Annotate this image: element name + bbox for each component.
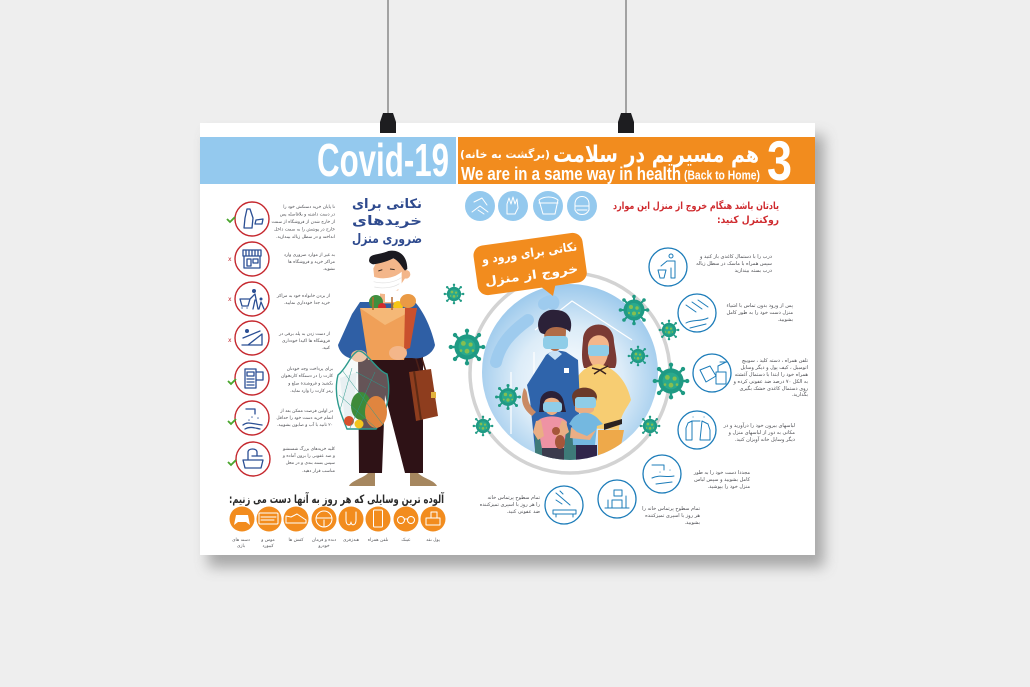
heading: shopping tips: خریدهای: [352, 214, 422, 229]
heading: shopping tips: [352, 197, 422, 247]
labels: دسته های: [232, 538, 250, 543]
labels: عینک: [401, 537, 411, 543]
step: disinfect items: روی دستمال کاغذی خشک بگیری: [740, 385, 809, 392]
step: clothes: دیگر وسایل خانه آویزان کنید.: [735, 436, 795, 443]
item: gloves: در دست داشته و بلافاصله پس: [280, 212, 335, 218]
step: disinfect bed: [480, 486, 583, 524]
poster sheet: [200, 123, 815, 555]
hanging strings: [388, 0, 626, 116]
reminder text: یادتان باشد هنگام خروج از منزل این موارد: [613, 199, 779, 212]
icon: wash: [465, 191, 495, 221]
step: trash: [649, 248, 772, 286]
hands: [351, 346, 407, 362]
header: covid title: [200, 134, 456, 186]
header: orange banner: هم مسیریم در سلامت: [553, 142, 759, 168]
shoes: [349, 473, 437, 486]
reminder text: روکنترل کنید:: [717, 215, 779, 226]
item: hand wash: در اولین فرصت ممکن بعد از: [279, 408, 333, 414]
reminder text: [613, 199, 779, 226]
labels: خودرو: [317, 544, 330, 549]
header: orange banner: (برگشت به خانه): [460, 148, 550, 161]
step: disinfect items: بگذارید.: [792, 391, 808, 398]
step: surfaces: [598, 480, 701, 526]
blue disc: [482, 284, 658, 460]
labels: کفش ها: [289, 537, 304, 543]
item: sink: [228, 442, 336, 476]
step: wash hands: بشویید.: [777, 317, 793, 323]
labels: تلفن همراه: [368, 538, 389, 543]
step: wash hands: [678, 294, 794, 332]
step: disinfect bed: ضد عفونی کنید.: [507, 509, 540, 515]
viruses: [444, 284, 689, 436]
step: surfaces: هر روز با اسپری تمیزکننده: [645, 513, 700, 519]
step: disinfect bed: تمام سطوح پرتماس خانه: [487, 495, 541, 501]
torso and arms: [338, 302, 435, 359]
binder clips: [380, 113, 634, 133]
item: sink: مناسب قرار دهید.: [302, 469, 335, 474]
header: orange banner: We are in a same way in health: [461, 163, 681, 184]
labels: هندزفری: [343, 538, 360, 543]
labels: کیبورد: [262, 543, 274, 549]
groceries: [369, 294, 416, 311]
list: home entry steps: [480, 248, 809, 526]
step: wash hands: پس از ورود بدون تماس با اشیاء: [727, 303, 794, 309]
header: covid title: Covid-19: [317, 134, 449, 186]
step: surfaces: بشویید.: [684, 520, 700, 526]
disc highlights: [496, 320, 528, 362]
item: hand wash: ۲۰ ثانیه با آب و صابون بشویید.: [277, 422, 333, 428]
item: escalator: کنید.: [322, 345, 331, 351]
object: cash: [420, 506, 446, 532]
labels: دنده و فرمان: [312, 538, 336, 543]
item: card reader: رمز کارت را وارد نماید.: [290, 388, 333, 394]
poster shadow: [208, 135, 824, 567]
item: gloves: از خارج شدن از فروشگاه از سمت: [271, 219, 335, 225]
callout: entry and exit tips: [472, 232, 588, 296]
item: family at store: [228, 282, 330, 316]
object: phone: [366, 506, 390, 532]
step: wash again: کامل بشویید و سپس لباس: [694, 477, 751, 483]
item: gloves: خارج در پوشش را به سمت داخل: [274, 228, 335, 232]
item: card reader: کارت را در دستگاه کارتخوان: [281, 373, 334, 379]
object: keyboard: [256, 506, 282, 532]
object: steering wheel: [312, 506, 336, 532]
object: earphones: [338, 506, 364, 532]
list: shopping rules: [227, 202, 336, 476]
icon: mask: [567, 191, 597, 221]
step: clothes: [678, 411, 795, 449]
illustration: shopper: [336, 251, 438, 486]
item: family at store: x: [228, 296, 232, 303]
heading: contaminated objects: آلوده ترین وسایلی که هر روز به آنها دست می زنیم:: [229, 492, 445, 507]
head: [369, 251, 410, 303]
step: disinfect items: به الکل ۷۰ درصد ضد عفونی کرده و: [733, 379, 808, 385]
item: sink: کلیه خریدهای بزرگ شستشو: [282, 445, 336, 452]
item: gloves: [227, 202, 336, 240]
step: disinfect items: [693, 354, 809, 398]
top icons: protective gear: [465, 191, 597, 221]
trousers: [358, 352, 423, 473]
item: escalator: فروشگاه ها اکیدا خودداری: [282, 338, 330, 344]
net bag: [336, 351, 389, 429]
callout: entry and exit tips: خروج از منزل: [484, 262, 579, 290]
item: escalator: از دست زدن به پله برقی در: [278, 332, 330, 337]
girl: [533, 391, 569, 466]
item: shop: [228, 242, 335, 276]
icon row: everyday objects: [230, 506, 446, 549]
item: card reader: برای پرداخت وجه خودتان: [287, 367, 333, 372]
woman: [578, 324, 631, 456]
outer ring: [470, 273, 670, 473]
collar: [385, 290, 400, 302]
step: wash again: منزل خود را بپوشید.: [708, 484, 750, 490]
item: gloves: تا پایان خرید دستکش خود را: [283, 204, 336, 210]
labels: [232, 537, 441, 549]
step: surfaces: تمام سطوح پرتماس خانه را: [642, 506, 701, 512]
labels: بازی: [237, 544, 245, 549]
shoulder bag: [409, 352, 438, 421]
header: orange banner: (Back to Home): [684, 168, 760, 182]
step: disinfect items: همراه خود را ابتدا با دستمال آغشته: [735, 371, 808, 378]
item: card reader: [228, 361, 334, 395]
item: escalator: [228, 321, 331, 355]
callout: entry and exit tips: نکاتی برای ورود و: [480, 239, 578, 268]
step: trash: سپس همراه با ماسک در سطل زباله: [696, 261, 772, 267]
item: escalator: x: [228, 337, 232, 344]
step: disinfect items: تلفن همراه ، دسته کلید ، سوییچ: [742, 358, 809, 364]
item: hand wash: اتمام خرید دست خود را حداقل: [276, 416, 333, 421]
heading: shopping tips: نکاتی برای: [352, 197, 422, 212]
labels: پول نقد: [426, 538, 441, 543]
object: glasses: [394, 506, 418, 532]
step: wash hands: منزل دست خود را به طور کامل: [726, 310, 793, 316]
icon: face shield: [533, 191, 563, 221]
labels: موس و: [260, 538, 275, 543]
item: sink: سپس بسته بندی و در محل: [286, 461, 335, 466]
item: hand wash: [228, 401, 333, 435]
item: shop: به غیر از موارد ضروری وارد: [284, 253, 335, 258]
object: game controller: [230, 506, 254, 532]
step: disinfect items: اتومبیل ، کیف پول و دیگر وسایل: [740, 364, 808, 371]
item: sink: و ضد عفونی را برون آماده و: [282, 453, 335, 459]
header: orange banner: 3: [767, 129, 792, 192]
item: family at store: خرید جدا خودداری نمایید.: [284, 301, 330, 306]
item: shop: x: [228, 256, 232, 263]
boy: [569, 388, 603, 466]
item: card reader: بکشید و فروشنده مبلغ و: [287, 380, 333, 386]
step: trash: درب بسته بیندازید: [735, 268, 772, 274]
icon: gloves: [498, 191, 528, 221]
step: wash again: [643, 455, 751, 493]
item: gloves: انداخته و در سطل زباله بیندازید.: [276, 235, 335, 240]
header: orange banner: [458, 129, 815, 192]
item: shop: مراکز خرید و فروشگاه ها: [288, 259, 335, 265]
object: shoes: [284, 506, 308, 532]
heading: shopping tips: ضروری منزل: [352, 232, 422, 247]
family: [522, 310, 631, 466]
item: family at store: از بردن خانواده خود به مراکز: [276, 293, 330, 299]
family circle illustration: [444, 273, 689, 473]
step: wash again: مجددا دست خود را به طور: [693, 470, 750, 476]
house outline: [511, 301, 632, 434]
step: clothes: مکانی به دور از لباسهای منزل و: [728, 430, 795, 436]
step: clothes: لباسهای بیرون خود را درآورید و در: [723, 422, 795, 429]
item: shop: نشوید.: [323, 267, 335, 272]
step: disinfect bed: را هر روز با اسپری تمیزکننده: [480, 502, 541, 508]
man: [522, 310, 580, 465]
step: trash: درب را با دستمال کاغذی باز کنید و: [699, 254, 772, 260]
paper bag: [360, 297, 417, 360]
